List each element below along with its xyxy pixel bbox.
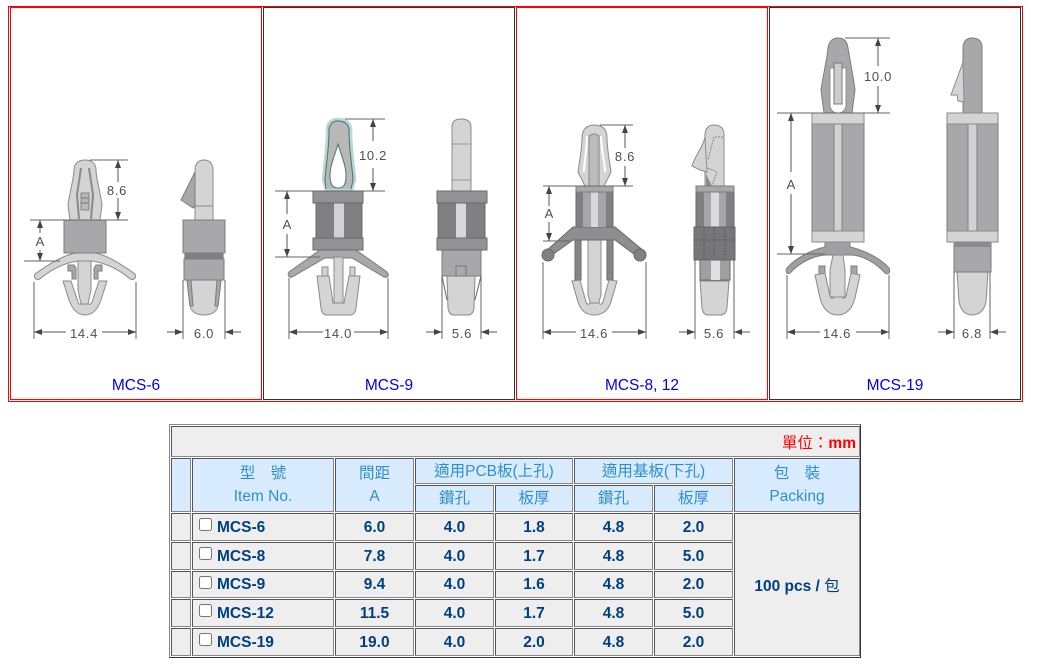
row: MCS-19: 4.8: [603, 634, 624, 650]
row: MCS-8: 4.8: [603, 548, 624, 564]
drawing: MCS-6 front view: [35, 160, 135, 315]
row: MCS-12: [171, 599, 733, 627]
header: spacing A: 間距: [359, 465, 390, 482]
panel: MCS-6 frame: [10, 7, 262, 400]
drawing: MCS-8, 12 side view: [692, 125, 735, 315]
row: MCS-8: 7.8: [364, 548, 385, 564]
header: PCB: [415, 458, 573, 484]
dimensions: MCS-8, 12: [543, 125, 750, 341]
row: MCS-19: [171, 628, 733, 656]
panel: MCS-9 frame: MCS-9: [365, 377, 413, 394]
header: packing: 包 裝: [774, 465, 820, 482]
row: MCS-12: MCS-12: [217, 604, 274, 622]
drawing: MCS-8, 12 front view: [542, 125, 646, 315]
dimensions: MCS-9: 14.0: [324, 326, 352, 341]
header: base board: 適用基板(下孔): [602, 462, 705, 480]
row: MCS-8: MCS-8: [217, 548, 265, 564]
header: spacing A: [335, 458, 414, 512]
unit row: [171, 426, 860, 457]
packing value cell: 100 pcs / 包: [754, 578, 840, 595]
row: MCS-6: 4.8: [603, 518, 624, 536]
drawing: MCS-6 side view: [181, 160, 225, 315]
dimensions: MCS-19: [777, 38, 1006, 341]
dimensions: MCS-9: 5.6: [452, 326, 472, 341]
row: MCS-6: 1.8: [523, 518, 545, 536]
header: PCB thickness: 板厚: [518, 490, 550, 507]
header: packing: Packing: [769, 488, 825, 505]
header: spacing A: A: [369, 488, 380, 505]
header: base board: [574, 458, 733, 484]
row: MCS-9: 4.8: [603, 576, 624, 593]
dimensions: MCS-9: 10.2: [359, 148, 387, 163]
drawing: MCS-19 front view: [786, 38, 890, 315]
header: item no: [192, 458, 334, 512]
drawing: MCS-9 side view: [437, 119, 487, 315]
dimensions: MCS-19: A: [787, 177, 796, 192]
dimensions: MCS-6: 6.0: [194, 326, 214, 341]
panel: MCS-8, 12 frame: [516, 7, 768, 400]
row: MCS-12: 11.5: [360, 604, 389, 622]
row: MCS-19: 4.0: [444, 634, 465, 650]
row: MCS-6: [171, 513, 733, 541]
row: MCS-6: 2.0: [683, 518, 704, 536]
outer red frame: [8, 6, 1023, 402]
row: MCS-9: 1.6: [523, 576, 545, 593]
row: MCS-19: 2.0: [683, 634, 704, 650]
row: MCS-9: MCS-9: [217, 576, 265, 593]
header: packing: [734, 458, 860, 512]
dimensions: MCS-19: 6.8: [962, 326, 982, 341]
row: MCS-8: 5.0: [683, 548, 704, 564]
row: MCS-12: 1.7: [523, 604, 545, 622]
header: base hole: 鑽孔: [598, 490, 629, 507]
dimensions: MCS-8, 12: A: [545, 206, 554, 221]
dimensions: MCS-9: A: [283, 217, 292, 232]
row: MCS-12: 4.0: [444, 604, 465, 622]
row: MCS-12: 5.0: [683, 604, 704, 622]
product drawings: [24, 38, 1006, 341]
row: MCS-19: MCS-19: [217, 634, 274, 650]
row: MCS-6: 6.0: [364, 518, 385, 536]
dimensions: MCS-6: [24, 160, 241, 341]
header: PCB: 適用PCB板(上孔): [434, 462, 554, 480]
row: MCS-9: [171, 571, 733, 598]
dimensions: MCS-8, 12: 14.6: [580, 326, 608, 341]
dimensions: MCS-9: [275, 119, 497, 341]
header: PCB hole: [415, 485, 494, 512]
row: MCS-9: 9.4: [364, 576, 385, 593]
row: MCS-9: 4.0: [444, 576, 465, 593]
dimensions: MCS-6: 8.6: [107, 183, 127, 198]
specification table: [169, 424, 861, 658]
dimensions: MCS-19: 10.0: [864, 69, 892, 84]
unit row: 單位：mm: [782, 434, 856, 452]
row: MCS-6: MCS-6: [217, 518, 265, 536]
panel: MCS-19 frame: [769, 7, 1021, 400]
dimensions: MCS-6: 14.4: [70, 326, 98, 341]
row: MCS-19: 2.0: [523, 634, 545, 650]
dimensions: MCS-8, 12: 8.6: [615, 149, 635, 164]
header: PCB thickness: [495, 485, 573, 512]
row: MCS-12: 4.8: [603, 604, 624, 622]
panel: MCS-6 frame: MCS-6: [112, 377, 160, 394]
row: MCS-19: 19.0: [359, 634, 390, 650]
header: item no: Item No.: [234, 488, 292, 505]
header: base hole: [574, 485, 653, 512]
packing value cell: [734, 513, 860, 656]
dimensions: MCS-19: 14.6: [823, 326, 851, 341]
row: MCS-6: 4.0: [444, 518, 465, 536]
row: MCS-8: [171, 542, 733, 570]
header: base thickness: [654, 485, 733, 512]
header: PCB hole: 鑽孔: [439, 490, 470, 507]
panel: MCS-8, 12 frame: MCS-8, 12: [605, 377, 679, 394]
row: MCS-9: 2.0: [683, 576, 704, 593]
header: base thickness: 板厚: [678, 490, 709, 507]
drawing: MCS-9 front view: [288, 119, 388, 315]
row: MCS-8: 4.0: [444, 548, 465, 564]
dimensions: MCS-6: A: [36, 234, 45, 249]
panel: MCS-19 frame: MCS-19: [867, 377, 923, 394]
header spacer cell: [171, 458, 191, 512]
header: item no: 型 號: [240, 465, 286, 482]
panel: MCS-9 frame: [263, 7, 515, 400]
dimensions: MCS-8, 12: 5.6: [704, 326, 724, 341]
drawing: MCS-19 side view: [947, 38, 998, 315]
row: MCS-8: 1.7: [523, 548, 545, 564]
